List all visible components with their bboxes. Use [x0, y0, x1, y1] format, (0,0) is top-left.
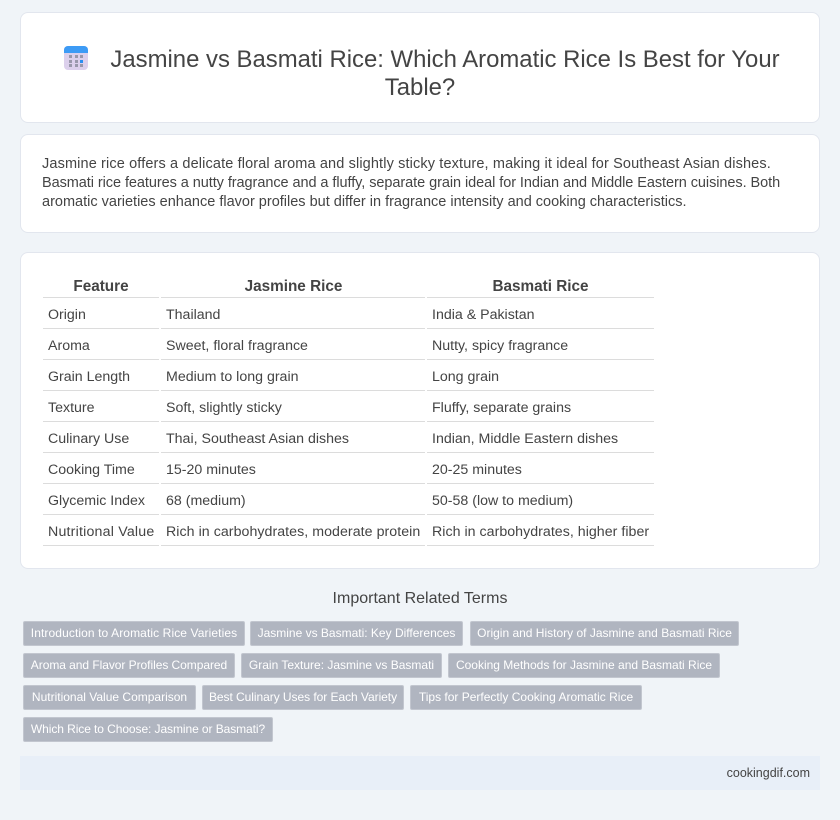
comparison table: Soft, slightly sticky — [166, 400, 282, 416]
table header: feature: Feature — [73, 278, 129, 295]
comparison table: Indian, Middle Eastern dishes — [432, 431, 618, 447]
related terms tags: Cooking Methods for Jasmine and Basmati Rice — [456, 658, 712, 672]
related terms tags: Which Rice to Choose: Jasmine or Basmati? — [31, 722, 265, 736]
related terms tags: Tips for Perfectly Cooking Aromatic Rice — [419, 690, 633, 704]
comparison table: Glycemic Index — [48, 493, 145, 509]
related terms tags: Aroma and Flavor Profiles Compared — [31, 658, 227, 672]
comparison table: Rich in carbohydrates, moderate protein — [166, 524, 420, 540]
comparison table: Culinary Use — [48, 431, 129, 447]
table header: jasmine: Jasmine Rice — [245, 278, 342, 295]
comparison table: Long grain — [432, 369, 499, 385]
title: Jasmine vs Basmati Rice: Which Aromatic Rice Is Best for Your — [110, 46, 780, 73]
comparison table: Thailand — [166, 307, 220, 323]
icon: calendar — [64, 46, 88, 70]
comparison table: India & Pakistan — [432, 307, 535, 323]
comparison table: Texture — [48, 400, 95, 416]
related terms heading: Important Related Terms — [333, 590, 507, 607]
related terms tags: Nutritional Value Comparison — [32, 690, 187, 704]
comparison table: Medium to long grain — [166, 369, 298, 385]
related terms tags: Origin and History of Jasmine and Basmati Rice — [477, 626, 732, 640]
footer bar — [20, 756, 820, 790]
intro text: Basmati rice features a nutty fragrance and a fluffy, separate grain ideal for Indian and Middle Eastern cuisines. Both — [42, 175, 780, 191]
title — [110, 46, 780, 101]
table card — [20, 252, 820, 569]
related terms tags: Best Culinary Uses for Each Variety — [209, 690, 397, 704]
header card — [20, 12, 820, 123]
comparison table: 15-20 minutes — [166, 462, 256, 478]
title: Table? — [385, 74, 455, 101]
comparison table: Origin — [48, 307, 86, 323]
comparison table: 20-25 minutes — [432, 462, 522, 478]
comparison table: Fluffy, separate grains — [432, 400, 571, 416]
comparison table: 68 (medium) — [166, 493, 246, 509]
intro text: aromatic varieties enhance flavor profiles but differ in fragrance intensity and cooking characteristics. — [42, 194, 686, 210]
related terms tags: Introduction to Aromatic Rice Varieties — [31, 626, 237, 640]
table header: basmati: Basmati Rice — [492, 278, 589, 295]
related terms tags: Grain Texture: Jasmine vs Basmati — [249, 658, 434, 672]
comparison table: Cooking Time — [48, 462, 135, 478]
footer source: cookingdif.com — [727, 766, 810, 780]
comparison table: Nutritional Value — [48, 524, 154, 540]
intro text — [42, 156, 780, 210]
comparison table: Thai, Southeast Asian dishes — [166, 431, 349, 447]
intro card — [20, 134, 820, 233]
intro text: Jasmine rice offers a delicate floral aroma and slightly sticky texture, making it ideal for Southeast Asian dishes. — [42, 156, 771, 172]
related terms tags: Jasmine vs Basmati: Key Differences — [258, 626, 455, 640]
comparison table: Nutty, spicy fragrance — [432, 338, 568, 354]
comparison table: Grain Length — [48, 369, 130, 385]
comparison table: Aroma — [48, 338, 90, 354]
comparison table: Sweet, floral fragrance — [166, 338, 308, 354]
comparison table: Rich in carbohydrates, higher fiber — [432, 524, 649, 540]
comparison table: 50-58 (low to medium) — [432, 493, 573, 509]
